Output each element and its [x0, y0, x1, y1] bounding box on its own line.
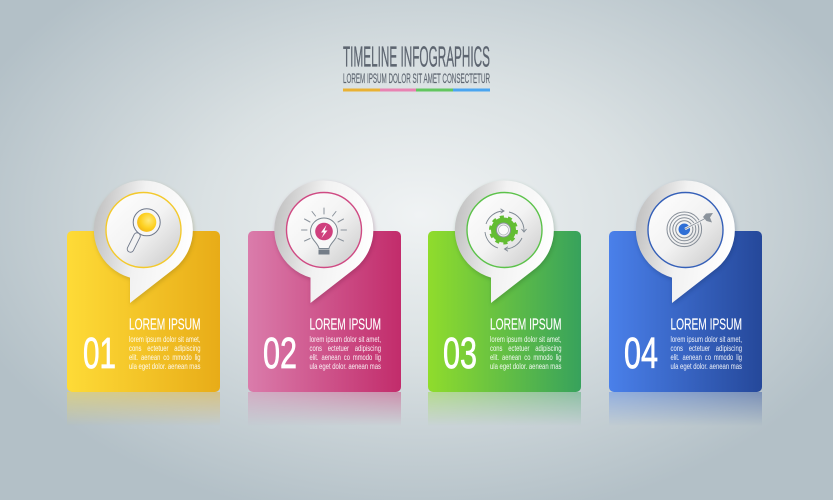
body text: ula eget dolor. aenean mas	[129, 361, 200, 371]
heading: LOREM IPSUM	[670, 316, 742, 334]
body text: lorem ipsum dolor sit amet,	[310, 334, 381, 344]
card reflection	[248, 392, 401, 422]
card reflection	[67, 392, 220, 422]
pin	[455, 180, 555, 305]
body text: elit. aenean co mmodo lig	[310, 352, 381, 362]
body text: ula eget dolor. aenean mas	[670, 361, 742, 371]
title block	[343, 42, 490, 92]
pin	[274, 180, 374, 305]
card background	[428, 231, 581, 392]
card reflection	[609, 392, 762, 422]
body text: cons ectetuer adipiscing	[670, 343, 742, 353]
icon: target with arrow	[667, 212, 713, 247]
body text: lorem ipsum dolor sit amet,	[129, 334, 200, 344]
body text: elit. aenean co mmodo lig	[490, 352, 562, 362]
pin	[636, 180, 736, 305]
body text	[490, 334, 562, 371]
number 03: 03	[443, 329, 477, 378]
number 04: 04	[624, 329, 658, 378]
body text: lorem ipsum dolor sit amet,	[490, 334, 562, 344]
body text: cons ectetuer adipiscing	[310, 343, 381, 353]
heading: LOREM IPSUM	[129, 316, 200, 334]
body text	[310, 334, 381, 371]
colored title bar	[343, 88, 490, 92]
body text: cons ectetuer adipiscing	[490, 343, 562, 353]
pin	[94, 180, 194, 305]
card background	[609, 231, 762, 392]
body text: ula eget dolor. aenean mas	[310, 361, 381, 371]
panel: step 01	[67, 180, 220, 426]
heading: LOREM IPSUM	[490, 316, 562, 334]
heading: LOREM IPSUM	[310, 316, 381, 334]
card reflection	[428, 392, 581, 422]
body text: elit. aenean co mmodo lig	[670, 352, 742, 362]
icon: light bulb	[302, 208, 346, 254]
icon: gear with cycle arrows	[485, 209, 526, 251]
body text: ula eget dolor. aenean mas	[490, 361, 562, 371]
body text: lorem ipsum dolor sit amet,	[670, 334, 742, 344]
panel: step 03	[428, 180, 581, 426]
body text	[129, 334, 201, 371]
panel: step 02	[248, 180, 401, 426]
icon: magnifier	[130, 209, 160, 249]
body text: cons ectetuer adipiscing	[129, 343, 201, 353]
card background	[67, 231, 220, 392]
number 01: 01	[83, 329, 116, 378]
text: TIMELINE INFOGRAPHICS	[343, 42, 490, 74]
body text: elit. aenean co mmodo lig	[129, 352, 201, 362]
number 02: 02	[263, 329, 297, 378]
body text	[670, 334, 742, 371]
panel: step 04	[609, 180, 762, 426]
text: LOREM IPSUM DOLOR SIT AMET CONSECTETUR	[343, 71, 490, 86]
card background	[248, 231, 401, 392]
